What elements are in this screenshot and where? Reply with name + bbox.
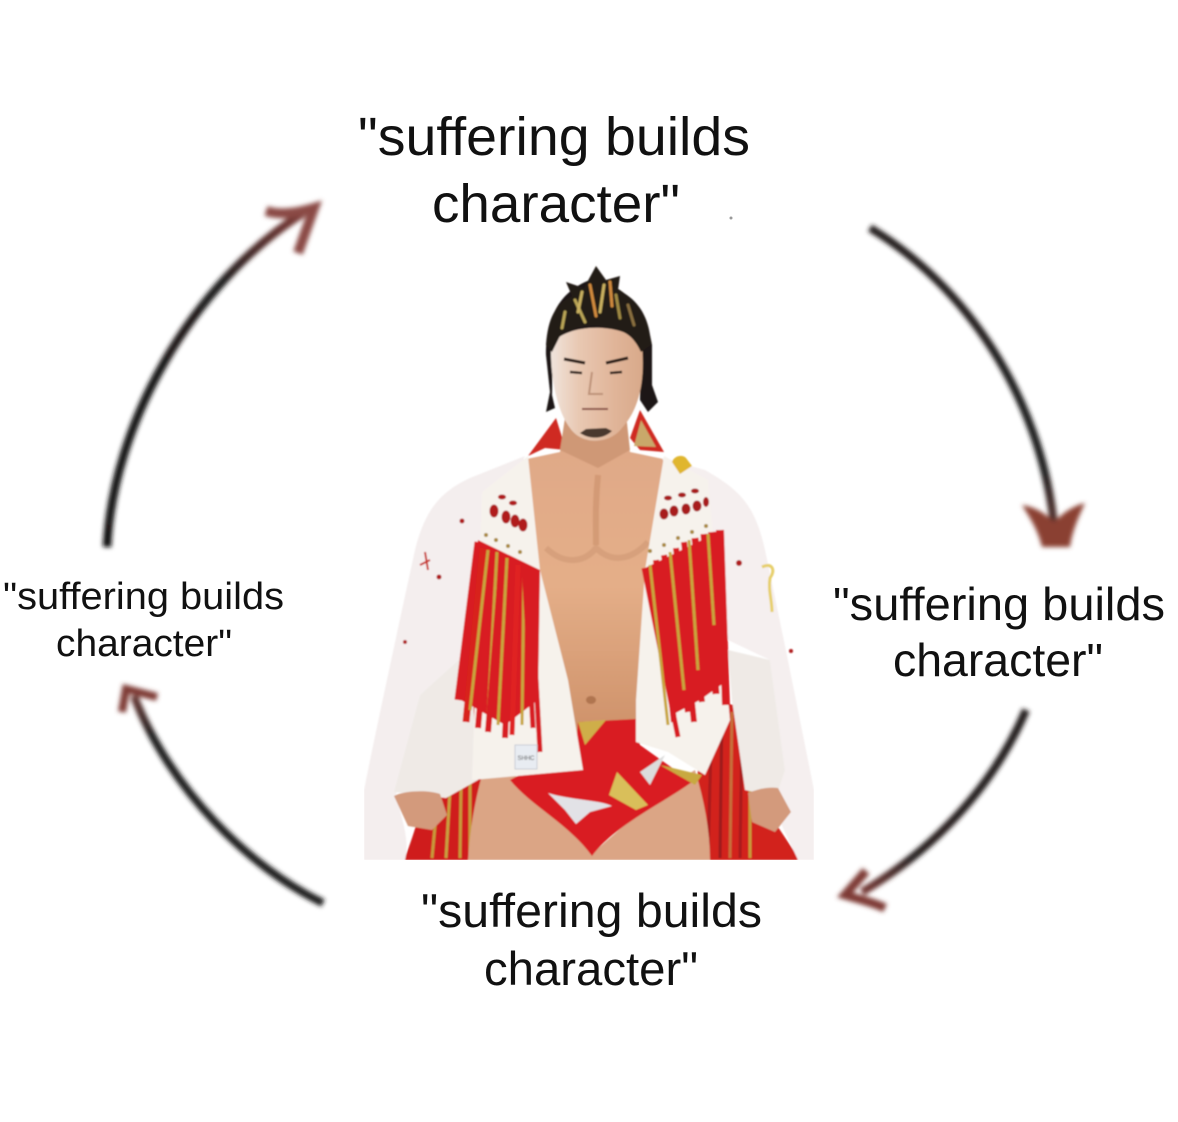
facial features	[564, 358, 628, 438]
text: left label: character"	[56, 623, 232, 665]
trunks	[510, 719, 702, 856]
fist: right	[748, 788, 791, 832]
figure: wrestler in white fringed jacket and red trunks	[364, 266, 814, 860]
text: left label: "suffering builds	[3, 576, 284, 618]
jewels: left	[484, 494, 528, 554]
jacket tag	[515, 745, 537, 769]
hair top	[546, 266, 651, 352]
arrow: right side pointing down to right label	[870, 228, 1085, 547]
cape: left	[364, 456, 525, 860]
fist: left	[394, 791, 447, 830]
neck	[560, 405, 630, 468]
cape: right	[662, 458, 814, 860]
text: bottom label: "suffering builds	[421, 884, 762, 937]
gold ornament and cape studs	[403, 456, 793, 653]
text: bottom label	[421, 884, 762, 995]
jacket front: right	[636, 456, 730, 775]
collar	[528, 410, 664, 456]
text: left label	[3, 576, 284, 665]
arrow: lower right pointing to bottom label	[845, 710, 1026, 908]
fringe: left	[457, 540, 540, 752]
legs	[468, 770, 710, 860]
speck near top label	[730, 216, 732, 220]
jewels: right	[648, 488, 709, 553]
cape lining fringe	[432, 705, 750, 858]
text: right label: character"	[893, 634, 1103, 686]
sleeve: left	[394, 650, 478, 798]
face	[551, 328, 643, 441]
jacket tag: SHHC	[517, 756, 535, 762]
text: right label: "suffering builds	[833, 578, 1165, 630]
text: bottom label: character"	[484, 942, 698, 995]
hair back	[546, 280, 658, 412]
cape lining	[404, 700, 800, 860]
text: top label: "suffering builds	[358, 107, 750, 167]
sleeve: right	[728, 650, 785, 797]
arrow: lower left pointing to left label	[122, 689, 323, 903]
text: right label	[833, 578, 1165, 686]
jacket front: left	[472, 456, 583, 780]
fringe: right	[644, 530, 728, 737]
text: top label	[358, 107, 750, 234]
text: top label: character"	[432, 174, 680, 234]
arrow: left side pointing up to top label	[107, 208, 314, 547]
torso	[522, 430, 668, 740]
